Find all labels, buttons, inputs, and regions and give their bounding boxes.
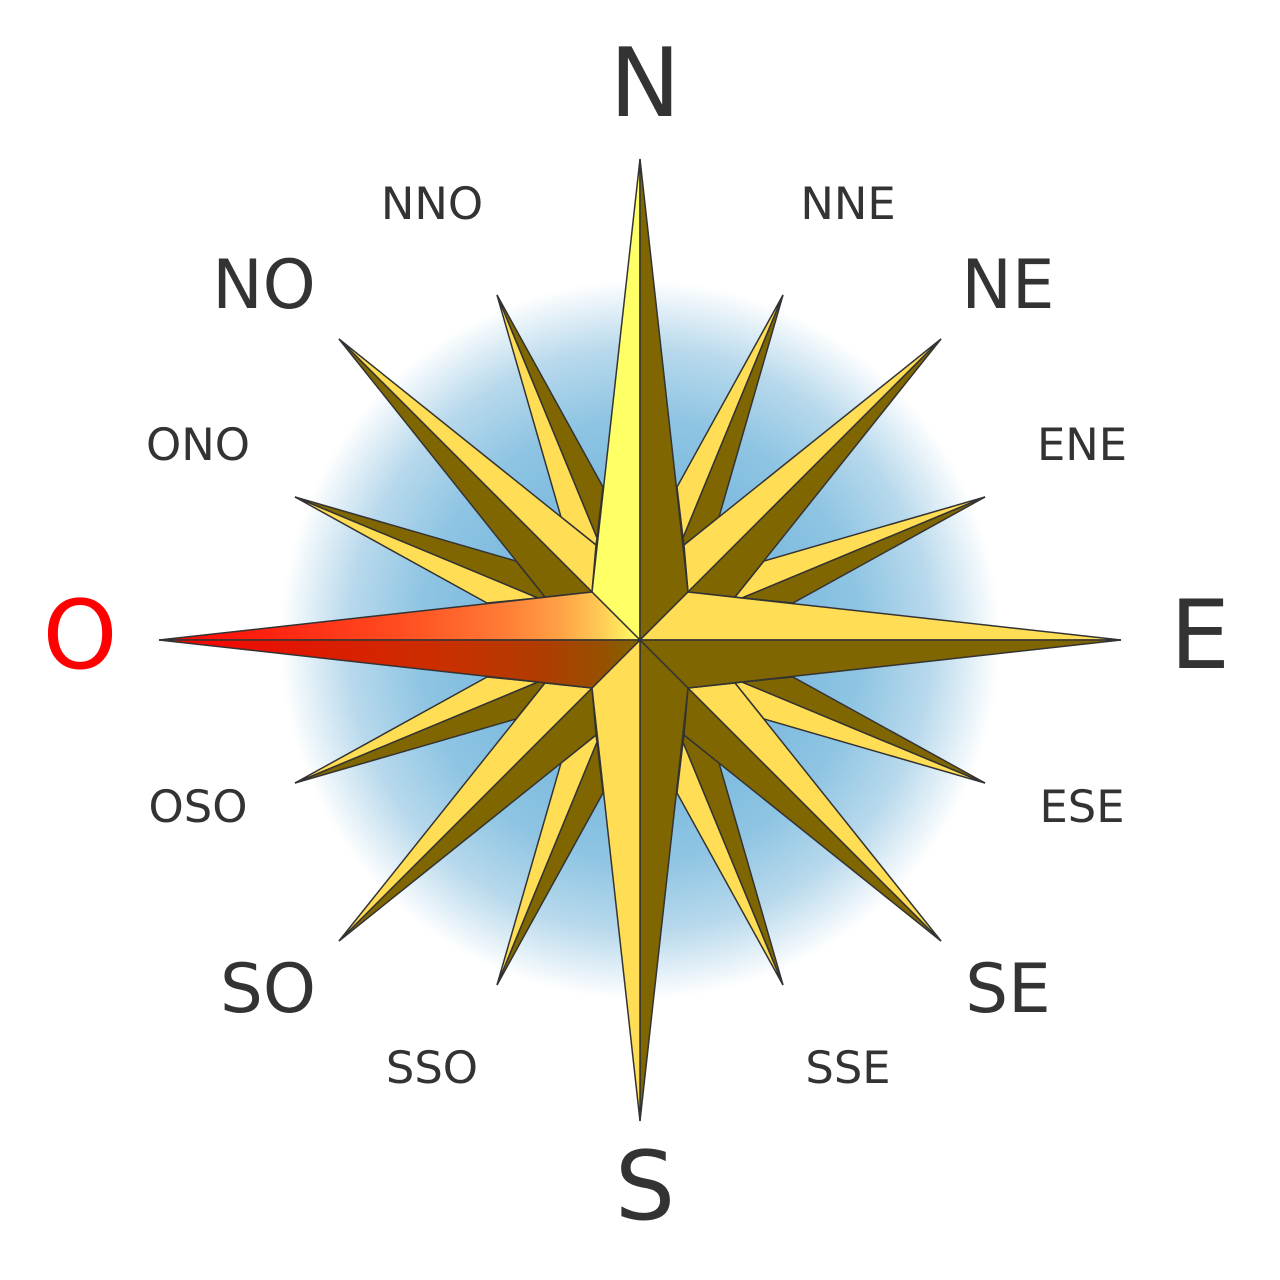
ray: NNO	[497, 295, 603, 545]
label: NNO: NNO	[381, 177, 483, 230]
label: ENE: ENE	[1037, 418, 1127, 471]
ray: SSE	[677, 735, 783, 985]
label: N: N	[609, 29, 681, 139]
ray: OSO	[295, 677, 545, 783]
blue radial glow background	[280, 280, 1000, 1000]
label: ESE: ESE	[1039, 780, 1125, 833]
ray: NNE	[677, 295, 783, 545]
point: E	[640, 592, 1121, 688]
label: ONO: ONO	[146, 418, 250, 471]
label: E: E	[1170, 581, 1230, 691]
label: NO: NO	[212, 245, 316, 324]
label: S: S	[615, 1132, 675, 1242]
label: SSE: SSE	[805, 1041, 891, 1094]
point: S	[592, 640, 688, 1121]
label: SSO: SSO	[386, 1041, 478, 1094]
ray: ENE	[735, 497, 985, 603]
main star	[159, 159, 1121, 1121]
ray: NE	[684, 339, 941, 597]
label: SE: SE	[965, 949, 1051, 1028]
diagonal rays	[339, 339, 941, 941]
point: O (red, west)	[159, 592, 640, 688]
label: NNE: NNE	[800, 177, 896, 230]
secondary rays	[295, 295, 985, 985]
label: SO: SO	[220, 949, 316, 1028]
label: OSO: OSO	[149, 780, 247, 833]
ray: ONO	[295, 497, 545, 603]
label: O: O	[43, 581, 117, 691]
label: NE: NE	[961, 245, 1055, 324]
ray: SSO	[497, 735, 603, 985]
point: N	[592, 159, 688, 640]
ray: SO	[339, 683, 596, 941]
ray: ESE	[735, 677, 985, 783]
ray: NO	[339, 339, 596, 597]
ray: SE	[684, 683, 941, 941]
